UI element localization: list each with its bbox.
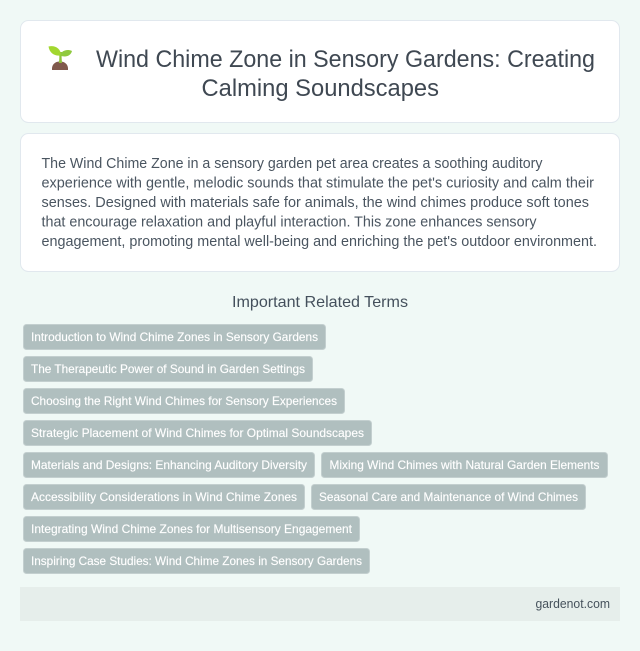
panel: title card: [20, 20, 620, 122]
tag: [24, 548, 370, 574]
tag: [312, 484, 586, 510]
tag: Choosing the Right Wind Chimes for Sensory Experiences: [31, 394, 337, 408]
tag: Mixing Wind Chimes with Natural Garden Elements: [330, 458, 600, 472]
title: Calming Soundscapes: [202, 75, 439, 102]
tag: [24, 452, 314, 478]
tag: [24, 356, 312, 382]
tag: Accessibility Considerations in Wind Chime Zones: [31, 490, 297, 504]
description text: engagement, promoting mental well-being and enriching the pet's outdoor environment.: [42, 233, 597, 250]
icon: seedling: [48, 46, 72, 70]
footer credit: gardenot.com: [536, 597, 610, 611]
panel: related term tags: [24, 324, 608, 574]
tag: Integrating Wind Chime Zones for Multisensory Engagement: [31, 522, 353, 536]
tag: [24, 516, 360, 542]
title: Wind Chime Zone in Sensory Gardens: Creating: [96, 46, 595, 73]
description text: The Wind Chime Zone in a sensory garden pet area creates a soothing auditory: [42, 155, 543, 172]
tag: Introduction to Wind Chime Zones in Sensory Gardens: [31, 330, 318, 344]
panel: description: [20, 134, 620, 272]
tag: [24, 420, 372, 446]
tag: Strategic Placement of Wind Chimes for Optimal Soundscapes: [31, 426, 364, 440]
tag: [24, 324, 326, 350]
tag: [24, 388, 344, 414]
description text: experience with gentle, melodic sounds that stimulate the pet's curiosity and calm their: [42, 174, 594, 192]
footer bar: [20, 587, 620, 621]
tag: [322, 452, 608, 478]
tag: Inspiring Case Studies: Wind Chime Zones in Sensory Gardens: [31, 554, 362, 568]
tag: [24, 484, 304, 510]
tag: Materials and Designs: Enhancing Auditory Diversity: [31, 458, 307, 472]
description text: that encourage relaxation and playful interaction. This zone enhances sensory: [42, 214, 537, 230]
description text: [42, 155, 597, 250]
title: [96, 46, 595, 102]
description text: senses. Designed with materials safe for animals, the wind chimes produce soft tones: [42, 194, 589, 211]
tag: The Therapeutic Power of Sound in Garden Settings: [31, 362, 305, 376]
tag: Seasonal Care and Maintenance of Wind Chimes: [319, 490, 578, 504]
heading: important related terms: Important Related Terms: [232, 294, 408, 311]
